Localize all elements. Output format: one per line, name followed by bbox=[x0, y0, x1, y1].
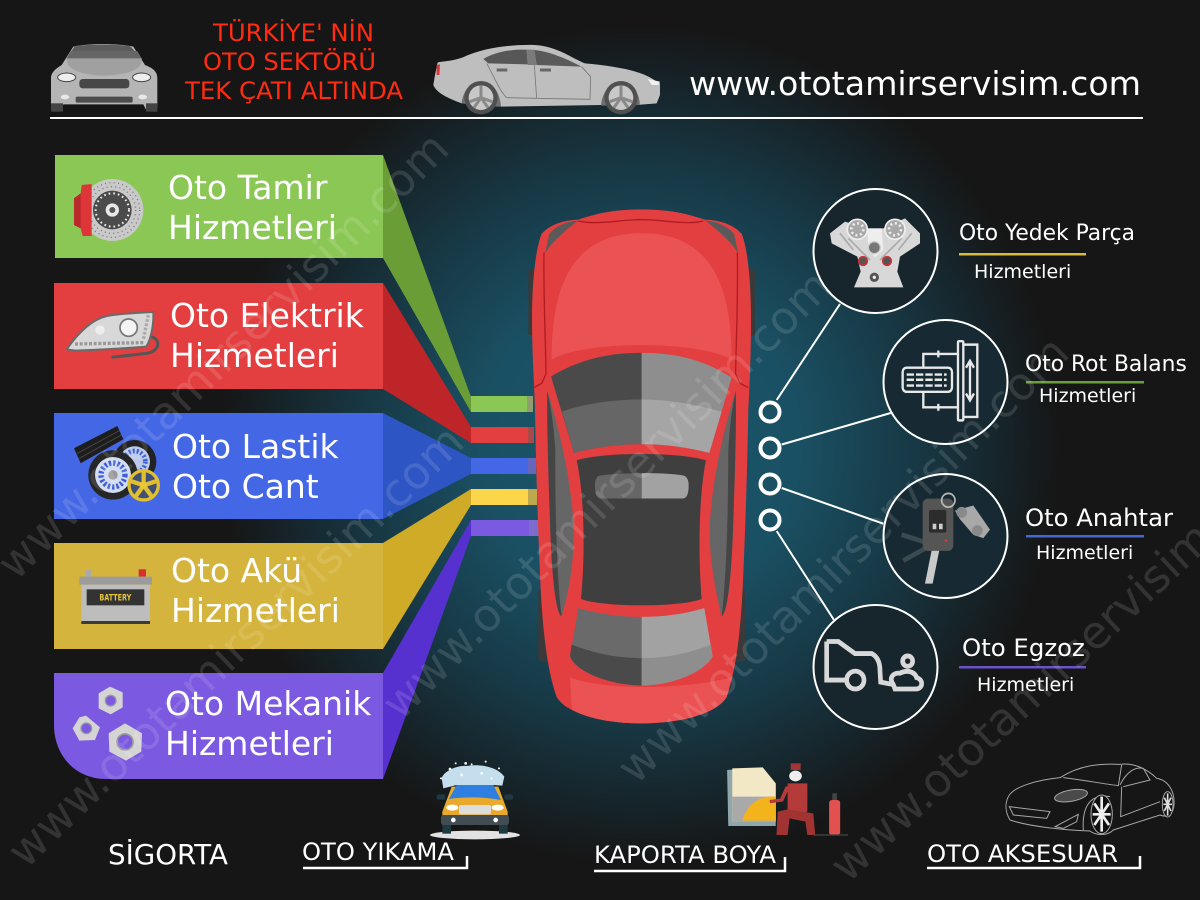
watermark: www.ototamirservisim.com bbox=[0, 121, 459, 590]
green bar bbox=[471, 396, 533, 412]
windshield bbox=[551, 353, 642, 453]
footer: oto aksesuar bbox=[927, 764, 1174, 868]
label: KAPORTA BOYA bbox=[594, 841, 777, 869]
rear highlight bbox=[570, 677, 732, 723]
hood highlight bbox=[552, 233, 732, 360]
circle bbox=[814, 605, 938, 729]
icon: side view grey car bbox=[433, 45, 660, 114]
underline bracket bbox=[303, 856, 467, 868]
heading: Oto Tamir bbox=[168, 168, 328, 207]
heading: Oto Elektrik bbox=[170, 296, 365, 335]
footer: oto yikama bbox=[302, 761, 520, 868]
panel: Oto Mekanik bbox=[54, 520, 540, 779]
icon: sports car outline bbox=[1006, 764, 1174, 834]
panel: Oto Tamir: Hizmetleri bbox=[168, 208, 337, 247]
header bbox=[50, 18, 1143, 119]
red block bbox=[54, 283, 383, 389]
heading: Oto Lastik bbox=[172, 427, 340, 466]
panel: Oto Elektrik: Hizmetleri bbox=[170, 336, 339, 375]
icon: exhaust bbox=[827, 641, 922, 689]
rear window bbox=[570, 608, 642, 686]
footer: sigorta: SİGORTA bbox=[108, 838, 228, 871]
circle bbox=[884, 474, 1008, 598]
purple bar bbox=[471, 520, 540, 536]
service: Oto Anahtar: Hizmetleri bbox=[1036, 542, 1133, 564]
website url: www.ototamirservisim.com bbox=[689, 64, 1141, 103]
watermark: www.ototamirservisim.com bbox=[0, 414, 474, 878]
icon: steering rack bbox=[903, 341, 977, 420]
heading: Oto Akü bbox=[171, 551, 302, 590]
heading: Oto Mekanik bbox=[165, 684, 372, 723]
circle bbox=[884, 320, 1008, 444]
tires bbox=[528, 269, 755, 662]
purple funnel bbox=[383, 520, 471, 779]
purple block bbox=[54, 673, 383, 779]
watermark: www.ototamirservisim.com bbox=[606, 325, 1079, 794]
panel: Oto Akü: Hizmetleri bbox=[171, 591, 340, 630]
icon: painter bbox=[727, 763, 848, 836]
panel: Oto Lastik bbox=[54, 413, 536, 519]
sunroof bbox=[595, 473, 642, 499]
icon: engine bbox=[830, 218, 920, 287]
icon: headlamp bbox=[67, 312, 158, 357]
title bbox=[184, 18, 404, 105]
roof bbox=[577, 454, 706, 605]
side windows bbox=[547, 391, 574, 617]
panel: Oto Lastik: Oto Cant bbox=[172, 467, 319, 506]
title: TÜRKİYE' NİN bbox=[212, 18, 374, 47]
label: OTO YIKAMA bbox=[302, 838, 455, 866]
icon: hex nuts bbox=[73, 687, 142, 761]
circle bbox=[814, 189, 938, 313]
panel: Oto Elektrik bbox=[54, 283, 534, 443]
panel: Oto Akü bbox=[54, 489, 537, 649]
red funnel bbox=[383, 283, 471, 443]
service: Oto Rot Balans: Hizmetleri bbox=[1039, 385, 1136, 407]
label: Oto Egzoz bbox=[962, 633, 1085, 662]
underline bracket bbox=[927, 856, 1140, 868]
body bbox=[532, 209, 751, 723]
icon: brake disc bbox=[74, 179, 143, 241]
panel seams bbox=[534, 220, 748, 388]
red car top view bbox=[528, 209, 755, 723]
title: TEK ÇATI ALTINDA bbox=[184, 77, 404, 105]
icon: battery: BATTERY bbox=[99, 594, 132, 604]
label: Oto Anahtar bbox=[1025, 503, 1173, 532]
red bar bbox=[471, 427, 534, 443]
yellow funnel bbox=[383, 489, 471, 649]
blue block bbox=[54, 413, 383, 519]
blue bar bbox=[471, 458, 536, 474]
blue funnel bbox=[383, 413, 471, 519]
watermark: www.ototamirservisim.com bbox=[371, 259, 842, 730]
service: Oto Anahtar bbox=[884, 474, 1173, 598]
headlights bbox=[545, 220, 578, 253]
service: Oto Yedek Parça: Hizmetleri bbox=[974, 261, 1071, 283]
service: Oto Yedek Parça bbox=[814, 189, 1135, 313]
panel: Oto Mekanik: Hizmetleri bbox=[165, 724, 334, 763]
icon: tires bbox=[74, 426, 158, 500]
panel: Oto Tamir bbox=[55, 155, 533, 412]
icon: front view grey car bbox=[51, 44, 157, 112]
yellow block bbox=[54, 543, 383, 649]
service: Oto Egzoz bbox=[814, 605, 1086, 729]
service: Oto Rot Balans bbox=[884, 320, 1187, 444]
icon: car key bbox=[902, 493, 990, 584]
icon: battery bbox=[79, 569, 152, 624]
service: Oto Egzoz: Hizmetleri bbox=[977, 674, 1074, 696]
green funnel bbox=[383, 155, 471, 412]
icon: car wash bbox=[430, 761, 520, 839]
underline bracket bbox=[594, 857, 785, 871]
yellow bar bbox=[471, 489, 537, 505]
connector dots and lines bbox=[760, 304, 891, 620]
footer: kaporta boya bbox=[594, 763, 848, 871]
title: OTO SEKTÖRÜ bbox=[203, 47, 376, 76]
label: Oto Yedek Parça bbox=[959, 221, 1135, 246]
label: Oto Rot Balans bbox=[1025, 352, 1187, 377]
green block bbox=[55, 155, 383, 258]
label: OTO AKSESUAR bbox=[927, 840, 1118, 868]
